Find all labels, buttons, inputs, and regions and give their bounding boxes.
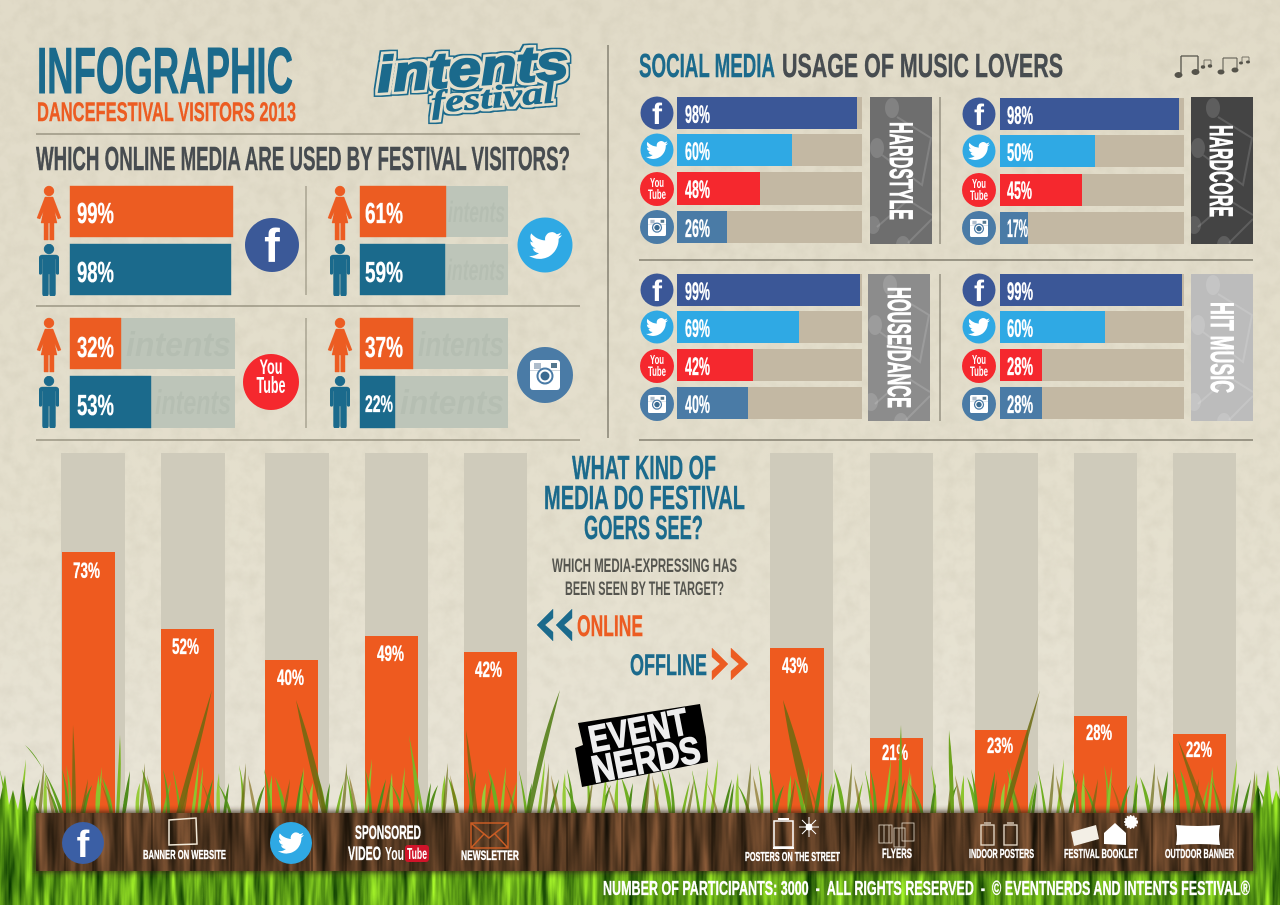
bar: 73%: 73% [73,558,100,583]
bar: instagram 40%: 40% [685,391,710,419]
bar: facebook 99% [1000,274,1182,306]
icon: youtube: You [650,175,664,190]
logo: event nerds [575,700,708,792]
item: banner on website [143,818,226,862]
chart tracks [770,453,1236,813]
legend: online: ONLINE [577,610,643,643]
bar: 49% [365,636,418,814]
icon: youtube: You [260,356,282,379]
bar: female 37%: intents [418,326,504,364]
genre label [1187,97,1253,254]
icon: youtube: You [972,176,986,191]
bar: twitter 60%: 60% [685,138,710,166]
icon: facebook: f [264,219,280,272]
bar: female 99%: 99% [77,198,114,230]
bar: twitter 60% [677,134,792,166]
bar: 52%: 52% [172,634,199,659]
bar: male 98% [70,244,231,295]
icon: female [37,318,61,372]
title block [37,34,296,127]
legend: offline: OFFLINE [630,649,707,682]
bar: female 61% [360,186,508,237]
icon: youtube: You [650,352,664,367]
bar: instagram 28%: 28% [1007,391,1033,419]
bar: twitter 50% [1000,135,1095,167]
item: posters on the street: POSTERS ON THE STREET [745,849,840,864]
panel: twitter gender [328,186,572,297]
bar: instagram 26%: 26% [685,215,710,243]
bar: facebook 99%: 99% [685,278,710,306]
subtitle: DANCEFESTIVAL VISITORS 2013 [37,97,296,127]
item: sponsored video youtube: Tube [407,846,427,863]
bar: 52% [161,629,214,814]
icon: twitter [518,218,572,272]
icon: youtube: Tube [970,363,988,379]
icon: twitter [962,134,996,168]
tracks [677,274,862,419]
icon: youtube: Tube [970,187,988,203]
bar: instagram 40% [677,387,748,419]
item: posters on the street [745,817,840,864]
bar: twitter 69%: 69% [685,315,710,343]
bar: female 37%: 37% [365,332,403,364]
genre label: HARDSTYLE [883,122,919,220]
bar: female 37% [360,318,508,369]
side grass left [0,775,40,875]
logo: intents festival: intents [375,34,570,103]
genre label [1187,274,1253,431]
bar: female 61%: intents [448,196,505,229]
logo: intents festival: festival [429,73,556,120]
icon: twitter [270,822,312,864]
tall grass blades [25,690,1207,814]
icon: youtube [243,354,299,410]
genre label: HOUSE/DANCE [881,287,917,408]
bottom grass [0,868,1280,905]
back grass [0,745,1280,815]
bar: 23%: 23% [987,733,1013,758]
bar: twitter 60% [1000,311,1105,343]
icon: female [37,186,61,240]
icon: youtube: Tube [648,186,666,202]
icon: youtube: Tube [256,372,286,398]
bar: 40% [265,660,318,814]
chart: media seen, online [61,453,527,814]
bar: 28% [1074,716,1127,814]
heading: what kind of media: WHAT KIND OF [572,449,716,486]
item: sponsored video youtube: SPONSORED [355,823,421,844]
icon: female [328,318,352,372]
icon: facebook: f [974,275,985,308]
bar: female 61%: 61% [365,198,403,230]
bar: female 32% [70,318,235,369]
bar: 43%: 43% [782,653,808,678]
bar: 22%: 22% [1186,737,1212,762]
icon: twitter [962,310,996,344]
bar: male 59% [360,244,508,295]
bar: youtube 28%: 28% [1007,353,1033,381]
panel: hardstyle [640,96,932,254]
heading: social media usage: USAGE OF MUSIC LOVERS [782,47,1063,84]
icon: youtube [640,349,674,383]
tracks [1000,274,1184,419]
chart: media seen, offline [770,453,1236,814]
bar: 49%: 49% [377,641,404,666]
sub-heading: BEEN SEEN BY THE TARGET? [565,579,724,600]
item: festival booklet: FESTIVAL BOOKLET [1064,846,1138,861]
genre label [864,274,930,431]
icon: twitter [640,134,674,166]
bar: youtube 48%: 48% [685,176,710,204]
bar: 73% [62,552,115,814]
logo: event nerds: NERDS [588,729,704,792]
icon: youtube [962,173,996,207]
icon: youtube: Tube [648,363,666,379]
bar: 22% [1173,734,1226,814]
bar: 42% [464,652,517,814]
bar: instagram 17% [1000,212,1028,244]
genre label: HARDCORE [1203,125,1239,217]
sub-heading [552,556,737,600]
bar: youtube 48% [677,172,760,205]
bar: youtube 45% [1000,174,1082,206]
item: sponsored video youtube: VIDEO [348,844,381,865]
icon: youtube [640,172,674,206]
chart tracks [61,453,527,813]
icon: instagram [640,210,674,244]
icon: facebook [962,274,996,308]
icon: instagram [962,211,996,245]
heading: online media: WHICH ONLINE MEDIA ARE USED BY FESTIVAL VISITORS? [36,140,570,177]
bar: 28%: 28% [1086,720,1112,745]
icon: facebook [245,218,299,272]
panel: youtube gender [37,318,299,429]
icon: youtube [962,349,996,383]
icon: facebook: f [652,275,663,308]
bar: 21% [870,738,923,814]
bar: 40%: 40% [277,665,304,690]
icon: facebook: f [652,98,663,131]
panel: hardcore: 17% [1007,215,1028,243]
icon: facebook [62,822,104,866]
icon: male [39,244,59,297]
sub-heading: WHICH MEDIA-EXPRESSING HAS [552,556,737,577]
genre label: HIT MUSIC [1204,302,1240,393]
bar: facebook 99%: 99% [1007,278,1033,306]
icon: male [330,376,350,429]
bar: male 22%: 22% [365,391,393,418]
bar: facebook 98% [1000,98,1179,130]
bar: male 53%: 53% [77,390,114,422]
main title: INFOGRAPHIC [37,34,293,107]
bar: facebook 98%: 98% [1007,102,1033,130]
item: sponsored video youtube: You [385,844,404,864]
bar: male 22%: intents [400,384,504,422]
bar: facebook 98%: 98% [685,101,710,129]
bar: female 32%: 32% [77,332,114,364]
icon: instagram [517,347,573,403]
panel: facebook gender [37,186,299,297]
heading: social media usage: SOCIAL MEDIA [639,47,775,84]
icon: female [328,186,352,240]
footer band: media legend [34,811,1255,873]
icon: music notes [1175,56,1250,78]
bar: male 53%: intents [155,384,231,422]
logo: intents festival [375,34,570,120]
bar: twitter 50%: 50% [1007,139,1033,167]
bar: instagram 28% [1000,387,1042,419]
icon: male [39,376,59,429]
icon: male [330,244,350,297]
icon: facebook [962,98,996,132]
bar: female 99% [70,186,233,237]
heading: social media usage [639,47,1063,84]
bar: 21%: 21% [882,740,908,765]
bar: youtube 45%: 45% [1007,177,1032,205]
side grass right [1250,770,1280,875]
item: sponsored video youtube [348,823,429,865]
logo: event nerds: EVENT [585,701,691,762]
icon: instagram [640,387,674,421]
bar: male 59%: intents [447,254,505,287]
item: newsletter: NEWSLETTER [461,847,519,863]
bar: twitter 60%: 60% [1007,315,1033,343]
legend: online [537,609,643,643]
bar: male 59%: 59% [365,257,403,289]
item: flyers: FLYERS [882,845,912,861]
item: indoor posters [969,823,1034,861]
icon: facebook [640,274,674,308]
icon: facebook: f [974,99,985,132]
heading: what kind of media: MEDIA DO FESTIVAL [544,479,745,516]
bar: youtube 42%: 42% [685,353,710,381]
item: flyers [879,823,914,861]
bar: facebook 99% [677,274,860,306]
bar: facebook 98% [677,97,857,129]
icon: instagram [962,387,996,421]
panel: instagram gender [328,318,573,429]
bar: 23% [975,730,1028,814]
heading: what kind of media [544,449,745,546]
bar: female 32%: intents [126,326,231,364]
genre label [866,97,932,254]
icon: youtube: You [972,352,986,367]
bar: twitter 69% [677,311,799,343]
item: banner on website: BANNER ON WEBSITE [143,847,226,862]
panel: hit music [962,274,1253,431]
icon: facebook: f [77,824,90,866]
tracks [1000,98,1184,244]
item: outdoor banner [1165,825,1234,861]
icon: facebook [640,96,674,131]
bar: 43% [770,648,824,814]
panel: house/dance [640,274,930,431]
bar: male 98%: 98% [77,257,114,289]
panel: hardcore [962,97,1253,254]
bar: male 53% [70,376,235,428]
bar: youtube 42% [677,349,753,381]
item: indoor posters: INDOOR POSTERS [969,846,1034,861]
tracks [677,97,862,243]
item: festival booklet [1064,816,1138,861]
bar: youtube 28% [1000,349,1042,381]
heading: what kind of media: GOERS SEE? [584,509,703,546]
bar: 42%: 42% [475,657,502,682]
icon: twitter [640,310,674,344]
bar: instagram 26% [677,211,727,243]
item: newsletter [461,823,519,863]
bar: male 22% [360,376,508,428]
